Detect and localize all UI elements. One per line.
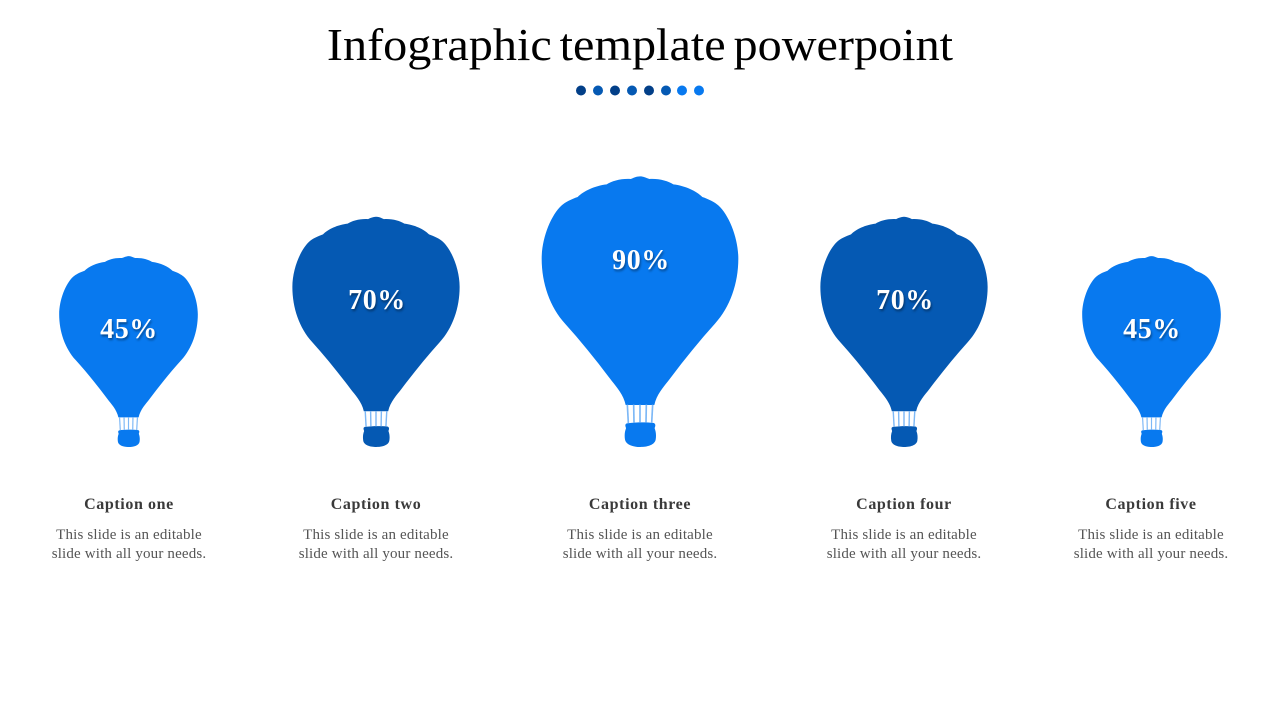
text five: This slide is an editable: [1078, 527, 1224, 543]
value: balloon two: 70%: [348, 285, 406, 316]
balloon four: [820, 217, 988, 447]
text five: [1074, 527, 1228, 562]
value: balloon four: 70%: [876, 285, 934, 316]
decorative dots under title: [576, 86, 704, 96]
text one: slide with all your needs.: [52, 546, 206, 562]
text three: slide with all your needs.: [563, 546, 717, 562]
caption five: Caption five: [1105, 496, 1197, 513]
text one: [52, 527, 206, 562]
text two: This slide is an editable: [303, 527, 449, 543]
value: balloon one: 45%: [100, 314, 158, 345]
text three: This slide is an editable: [567, 527, 713, 543]
title: Infographic template powerpoint: [327, 19, 953, 70]
caption one: Caption one: [84, 496, 174, 513]
balloon two: [292, 217, 460, 447]
value: balloon five: 45%: [1123, 314, 1181, 345]
text four: This slide is an editable: [831, 527, 977, 543]
text two: slide with all your needs.: [299, 546, 453, 562]
text three: [563, 527, 717, 562]
text five: slide with all your needs.: [1074, 546, 1228, 562]
balloon five: [1082, 256, 1221, 447]
caption two: Caption two: [331, 496, 421, 513]
text two: [299, 527, 453, 562]
caption four: Caption four: [856, 496, 952, 513]
text four: [827, 527, 981, 562]
balloon one: [59, 256, 198, 447]
text four: slide with all your needs.: [827, 546, 981, 562]
balloon three: [542, 176, 738, 447]
text one: This slide is an editable: [56, 527, 202, 543]
caption three: Caption three: [589, 496, 691, 513]
value: balloon three: 90%: [612, 245, 670, 276]
